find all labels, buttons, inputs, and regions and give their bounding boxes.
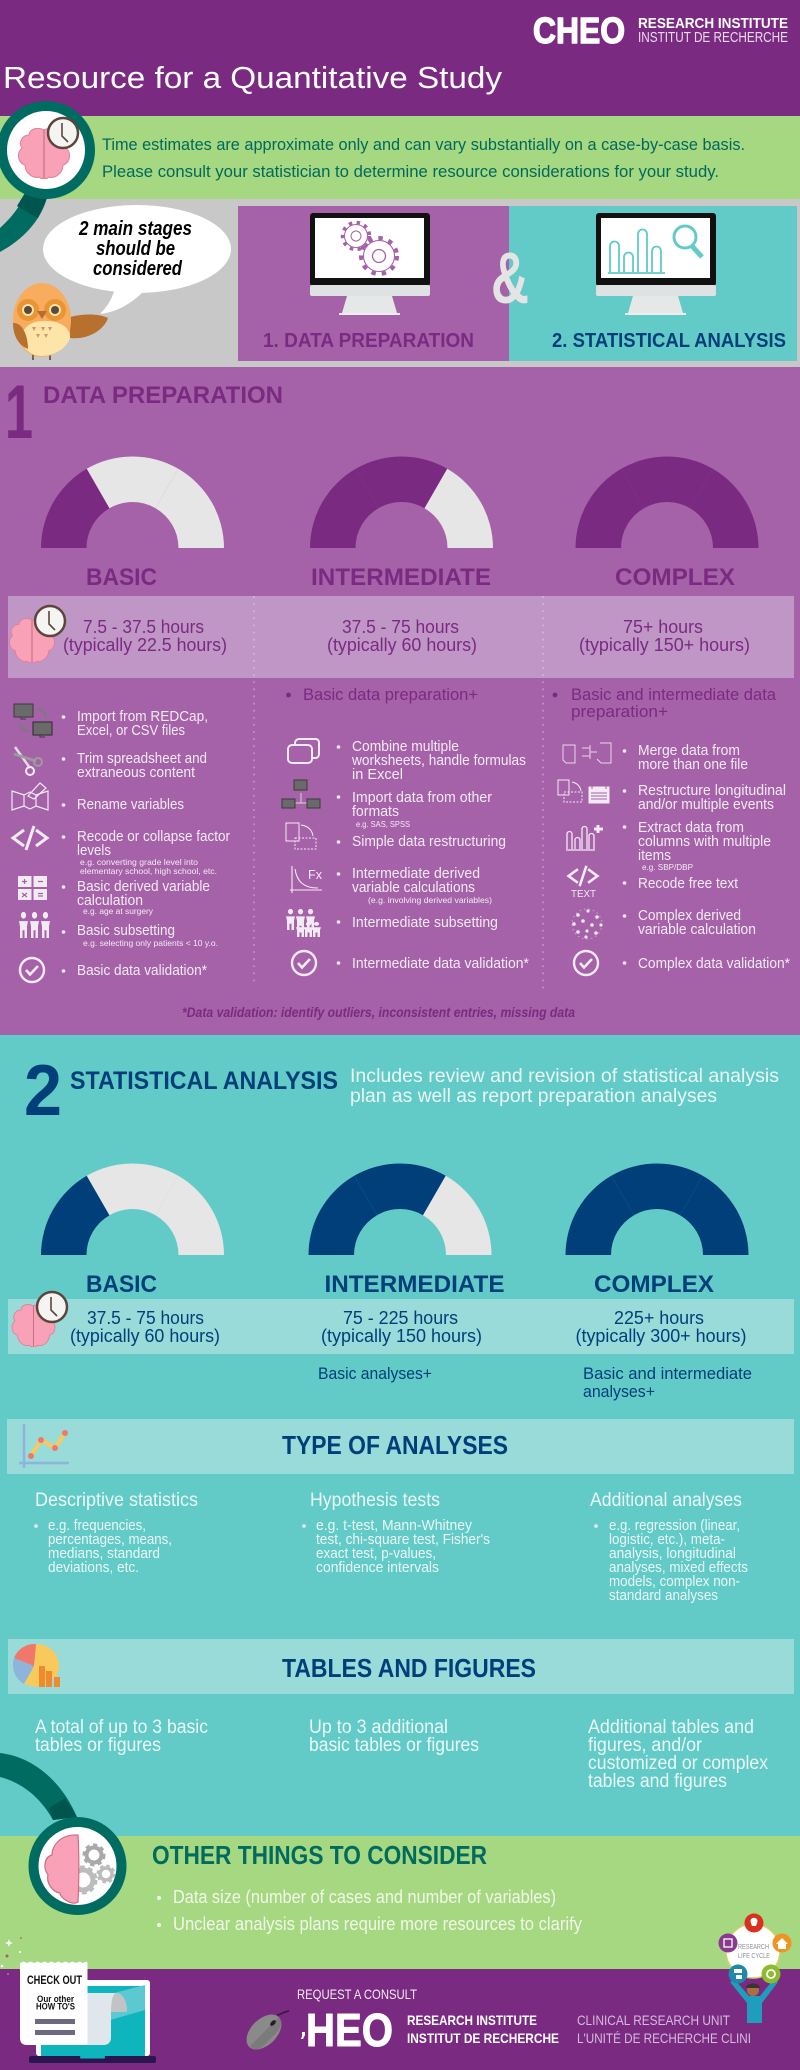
icon: calculator keys — [18, 876, 47, 900]
logo: CHEO Research Institute — [533, 10, 788, 51]
heading: data preparation: DATA PREPARATION — [43, 382, 283, 409]
logo: CHEO Research Institute: CHEO — [533, 10, 625, 51]
level labels: COMPLEX — [594, 1271, 714, 1298]
task text — [638, 743, 790, 972]
prerequisites text: analyses+ — [583, 1382, 655, 1401]
task text: columns with multiple — [638, 834, 771, 850]
icon: bars with plus — [566, 825, 603, 850]
label: 2. statistical analysis: 2. STATISTICAL ANALYSIS — [552, 330, 786, 352]
icon: magnifier with brain and clock — [0, 101, 95, 252]
task text: Basic subsetting — [77, 923, 175, 939]
hours text: 75+ hours — [623, 617, 703, 637]
hours text: 225+ hours — [614, 1308, 704, 1328]
table allowances text: tables and figures — [588, 1771, 727, 1792]
icon: import monitors — [14, 704, 52, 737]
notice text: Time estimates are approximate only and can vary substantially on a case-by-case basis. — [102, 136, 745, 154]
gauge: complex — [576, 457, 758, 548]
section intro: plan as well as report preparation analyses — [350, 1085, 717, 1107]
table allowances text: customized or complex — [588, 1753, 768, 1774]
column: additional analyses: Additional analyses — [590, 1490, 742, 1511]
task text: e.g. SBP/DBP — [642, 862, 693, 872]
speech text — [78, 218, 192, 280]
column: descriptive statistics — [34, 1490, 198, 1576]
task text: Merge data from — [638, 743, 740, 759]
heading: other things to consider: OTHER THINGS TO CONSIDER — [152, 1840, 487, 1870]
task text: extraneous content — [77, 765, 195, 781]
panel: statistical analysis — [509, 206, 797, 361]
receipt: HOW TO'S — [36, 2002, 75, 2012]
icon: fx curve — [290, 866, 322, 893]
level labels — [86, 1271, 714, 1298]
icon: fx curve: Fx — [308, 867, 322, 882]
task text: Restructure longitudinal — [638, 783, 786, 799]
table allowances text: Additional tables and — [588, 1717, 754, 1738]
label: 1. data preparation: 1. DATA PREPARATION — [263, 330, 474, 352]
task text: Intermediate subsetting — [352, 915, 498, 931]
receipt: Our other — [37, 1994, 74, 2005]
logo: CHEO footer: INSTITUT DE RECHERCHE — [407, 2030, 559, 2046]
logo: CHEO Research Institute: RESEARCH INSTITUTE — [638, 15, 788, 32]
considerations list: Data size (number of cases and number of variables) — [173, 1886, 556, 1907]
column: descriptive statistics: medians, standard — [48, 1546, 160, 1562]
task text: Intermediate derived — [352, 866, 480, 882]
task text: Import from REDCap, — [77, 709, 208, 725]
hours text: (typically 60 hours) — [70, 1326, 220, 1346]
column: additional analyses — [590, 1490, 748, 1604]
column lead — [553, 685, 777, 721]
task text — [351, 739, 529, 972]
receipt: CHECK OUT — [27, 1975, 82, 1987]
icon: brain and clock — [12, 1292, 67, 1347]
icon: brain and clock — [10, 606, 65, 663]
hours text: 37.5 - 75 hours — [87, 1308, 204, 1328]
icon: overlapping windows — [288, 739, 319, 763]
footnote: *Data validation: identify outliers, inconsistent entries, missing data — [182, 1004, 575, 1020]
column: hypothesis tests: Hypothesis tests — [310, 1490, 440, 1511]
icon: pie and bars — [13, 1644, 60, 1687]
heading: tables and figures: TABLES AND FIGURES — [282, 1653, 536, 1683]
icon: monitor with gears — [310, 213, 430, 315]
table allowances text: Up to 3 additional — [309, 1717, 448, 1738]
icon: research life cycle — [718, 1914, 792, 2023]
speech text: 2 main stages — [78, 218, 192, 240]
column: hypothesis tests: test, chi-square test, Fisher's — [316, 1532, 490, 1548]
icon: check — [574, 951, 598, 975]
stages band — [0, 199, 800, 367]
hours band — [8, 596, 794, 678]
icon: people — [19, 912, 50, 938]
column: complex tasks — [553, 685, 790, 975]
column: basic tasks — [12, 704, 230, 982]
column: hypothesis tests: exact test, p-values, — [316, 1546, 436, 1562]
speech bubble — [43, 205, 231, 314]
cycle label: RESEARCH — [738, 1944, 769, 1951]
notice band — [0, 116, 800, 199]
gauge: basic — [41, 457, 224, 548]
icon: network monitors — [282, 780, 320, 808]
level labels: BASIC — [86, 1271, 157, 1298]
logo: CHEO footer: HEO — [306, 2004, 393, 2056]
task text: Excel, or CSV files — [77, 723, 185, 739]
icon: check — [20, 958, 44, 982]
level labels — [86, 564, 735, 591]
task text: e.g. age at surgery — [83, 906, 154, 916]
cycle ring — [726, 1924, 780, 1978]
hours text: (typically 300+ hours) — [576, 1326, 746, 1346]
column: descriptive statistics: deviations, etc. — [48, 1560, 139, 1576]
column: descriptive statistics: Descriptive statistics — [35, 1490, 198, 1511]
icon: check — [292, 951, 316, 975]
hours text: 37.5 - 75 hours — [342, 617, 459, 637]
column: hypothesis tests — [302, 1490, 490, 1576]
icon: code brackets — [13, 826, 47, 850]
speech text: considered — [93, 258, 183, 280]
column: additional analyses: models, complex non- — [609, 1574, 740, 1590]
hours text: 75 - 225 hours — [343, 1308, 458, 1328]
icon: laptop with check out receipt — [1, 1937, 156, 2063]
icon: code with TEXT label — [569, 866, 597, 900]
band: type of analyses — [7, 1419, 794, 1474]
gauge: intermediate — [308, 1164, 492, 1255]
laptop — [29, 1980, 156, 2063]
icon: restructure and calendar — [558, 780, 609, 803]
task text: Rename variables — [77, 797, 184, 813]
icon: map and pencil — [12, 783, 48, 810]
column: additional analyses: standard analyses — [609, 1588, 718, 1604]
task text: Basic derived variable — [77, 879, 210, 895]
column lead: Basic and intermediate data — [571, 685, 777, 704]
considerations list: Unclear analysis plans require more resources to clarify — [173, 1913, 583, 1934]
task text: and/or multiple events — [638, 797, 774, 813]
bullets — [62, 715, 65, 973]
task text: calculation — [77, 893, 143, 909]
heading: statistical analysis: STATISTICAL ANALYSIS — [70, 1067, 338, 1095]
level labels: INTERMEDIATE — [311, 564, 491, 591]
icon: restructure — [286, 823, 316, 849]
icon: scissors — [14, 747, 42, 775]
hours band — [8, 1299, 794, 1354]
logo: CHEO footer — [301, 2004, 559, 2056]
level labels: BASIC — [86, 564, 157, 591]
cycle label: LIFE CYCLE — [738, 1953, 770, 1960]
icon: monitor with bar chart and magnifier — [596, 213, 716, 315]
hours text — [63, 617, 750, 655]
prerequisites text: Basic analyses+ — [318, 1364, 432, 1383]
column lead: Basic data preparation+ — [303, 685, 478, 704]
clinical research unit: CLINICAL RESEARCH UNIT — [577, 2012, 730, 2028]
considerations list — [157, 1886, 583, 1934]
icon: owl — [13, 283, 108, 360]
prerequisites text — [318, 1364, 752, 1401]
task text: items — [638, 848, 671, 864]
title: Resource for a Quantitative Study — [3, 60, 503, 95]
task text: formats — [352, 804, 399, 820]
scroll curl — [85, 1993, 127, 2045]
column: additional analyses: e.g. regression (linear, — [609, 1518, 740, 1534]
column: hypothesis tests: e.g. t-test, Mann-Whitney — [316, 1518, 473, 1534]
icon: merge files — [563, 743, 611, 763]
task text: Recode or collapse factor — [77, 829, 230, 845]
task text: Simple data restructuring — [352, 834, 506, 850]
task text: Extract data from — [638, 820, 744, 836]
icon: line chart — [19, 1424, 69, 1468]
logo: CHEO footer: RESEARCH INSTITUTE — [407, 2012, 537, 2028]
task text: worksheets, handle formulas — [351, 753, 526, 769]
panel: other things to consider — [0, 1836, 800, 1969]
task text: Trim spreadsheet and — [77, 751, 207, 767]
panel: data preparation — [238, 206, 509, 361]
ampersand: & — [491, 239, 529, 319]
level labels: COMPLEX — [615, 564, 735, 591]
task text: e.g. selecting only patients < 10 y.o. — [83, 938, 218, 948]
task text: e.g. SAS, SPSS — [356, 819, 410, 829]
person — [730, 1980, 778, 2023]
column: hypothesis tests: confidence intervals — [316, 1560, 439, 1576]
cycle label — [738, 1944, 770, 1960]
table allowances text: figures, and/or — [588, 1735, 703, 1756]
task text: Combine multiple — [352, 739, 459, 755]
hours text: (typically 60 hours) — [327, 635, 477, 655]
task text — [77, 709, 230, 979]
notice text: Please consult your statistician to determine resource considerations for your study. — [102, 163, 719, 181]
header band — [0, 0, 800, 116]
gauge: intermediate — [310, 457, 493, 548]
table allowances text: tables or figures — [35, 1735, 161, 1756]
column: descriptive statistics: percentages, means, — [48, 1532, 172, 1548]
hours text: (typically 150 hours) — [321, 1326, 482, 1346]
prerequisites text: Basic and intermediate — [583, 1364, 752, 1383]
hours text: (typically 22.5 hours) — [63, 635, 227, 655]
panel: section 2 statistical analysis — [0, 1035, 800, 1836]
speech text: should be — [96, 238, 175, 260]
task text: variable calculation — [638, 922, 756, 938]
heading: type of analyses: TYPE OF ANALYSES — [282, 1430, 508, 1460]
level labels: INTERMEDIATE — [324, 1271, 504, 1298]
icon: people groups — [286, 909, 321, 937]
task text: variable calculations — [352, 880, 475, 896]
icon: computer mouse — [240, 2008, 289, 2056]
band: tables and figures — [8, 1639, 794, 1694]
icon: magnifier with brain and gears — [0, 1753, 126, 1915]
section intro — [350, 1065, 779, 1107]
gauge: basic — [41, 1164, 224, 1255]
column: additional analyses: analysis, longitudinal — [609, 1546, 736, 1562]
bullets — [623, 749, 626, 965]
notice text — [102, 136, 745, 181]
task text: more than one file — [638, 757, 748, 773]
column: descriptive statistics: e.g. frequencies, — [48, 1518, 146, 1534]
task text: elementary school, high school, etc. — [80, 866, 217, 876]
receipt — [20, 1962, 88, 2045]
section number 2: 2 — [24, 1051, 62, 1131]
cycle nodes — [718, 1914, 792, 1984]
section intro: Includes review and revision of statistical analysis — [350, 1065, 779, 1087]
task text: levels — [77, 843, 111, 859]
task text: Complex data validation* — [638, 956, 790, 972]
column: additional analyses: logistic, etc.), meta- — [609, 1532, 725, 1548]
task text: Recode free text — [638, 876, 738, 892]
column lead: preparation+ — [571, 702, 668, 721]
bullets — [337, 745, 340, 965]
clinical research unit — [577, 2012, 751, 2046]
task text: (e.g. involving derived variables) — [368, 895, 492, 905]
hours text: 7.5 - 37.5 hours — [83, 617, 204, 637]
column: additional analyses: analyses, mixed effects — [609, 1560, 748, 1576]
icon: code with TEXT label: TEXT — [571, 888, 597, 900]
task text: Complex derived — [638, 908, 741, 924]
column: intermediate tasks — [282, 685, 529, 975]
gauge: complex — [566, 1164, 748, 1255]
task text: Import data from other — [352, 790, 492, 806]
sparkles — [1, 1937, 22, 1975]
task text: Intermediate data validation* — [352, 956, 529, 972]
hours text: (typically 150+ hours) — [579, 635, 750, 655]
task text: in Excel — [352, 767, 403, 783]
hours text — [70, 1308, 746, 1346]
panel: footer — [0, 1969, 800, 2070]
task text: e.g. converting grade level into — [80, 857, 198, 867]
table allowances text: A total of up to 3 basic — [35, 1717, 208, 1738]
table allowances text — [35, 1717, 768, 1792]
table allowances text: basic tables or figures — [309, 1735, 479, 1756]
panel: section 1 data preparation — [0, 367, 800, 1035]
task text: Basic data validation* — [77, 963, 207, 979]
section number 1: 1 — [5, 370, 33, 455]
request a consult: REQUEST A CONSULT — [297, 1986, 417, 2002]
clinical research unit: L'UNITÉ DE RECHERCHE CLINI — [577, 2030, 751, 2046]
icon: data network dots — [572, 909, 603, 939]
